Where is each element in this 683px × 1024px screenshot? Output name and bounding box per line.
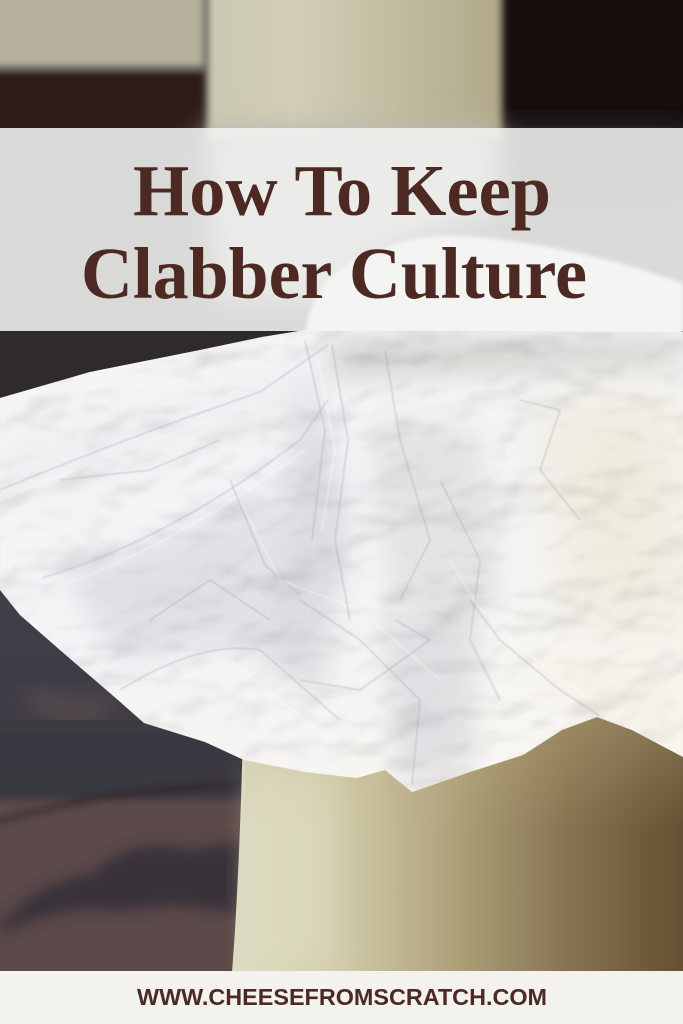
top left blurred wall and shelves xyxy=(0,0,683,420)
top blurred jar xyxy=(207,0,502,140)
footer bar xyxy=(0,971,683,1024)
wood dark grain xyxy=(0,842,240,935)
title: How To Keep xyxy=(133,150,551,231)
website url: WWW.CHEESEFROMSCRATCH.COM xyxy=(137,984,547,1010)
title: Clabber Culture xyxy=(81,233,587,314)
title xyxy=(81,150,587,314)
jar top dome xyxy=(305,235,683,400)
soft shading xyxy=(0,338,683,785)
backdrop behind title banner xyxy=(0,128,683,331)
crumple texture xyxy=(0,325,683,800)
lower jar xyxy=(232,640,683,972)
main folds xyxy=(0,340,600,785)
photo: coffee filter paper xyxy=(0,235,683,800)
title banner xyxy=(0,128,683,331)
dark wood table xyxy=(0,590,245,980)
